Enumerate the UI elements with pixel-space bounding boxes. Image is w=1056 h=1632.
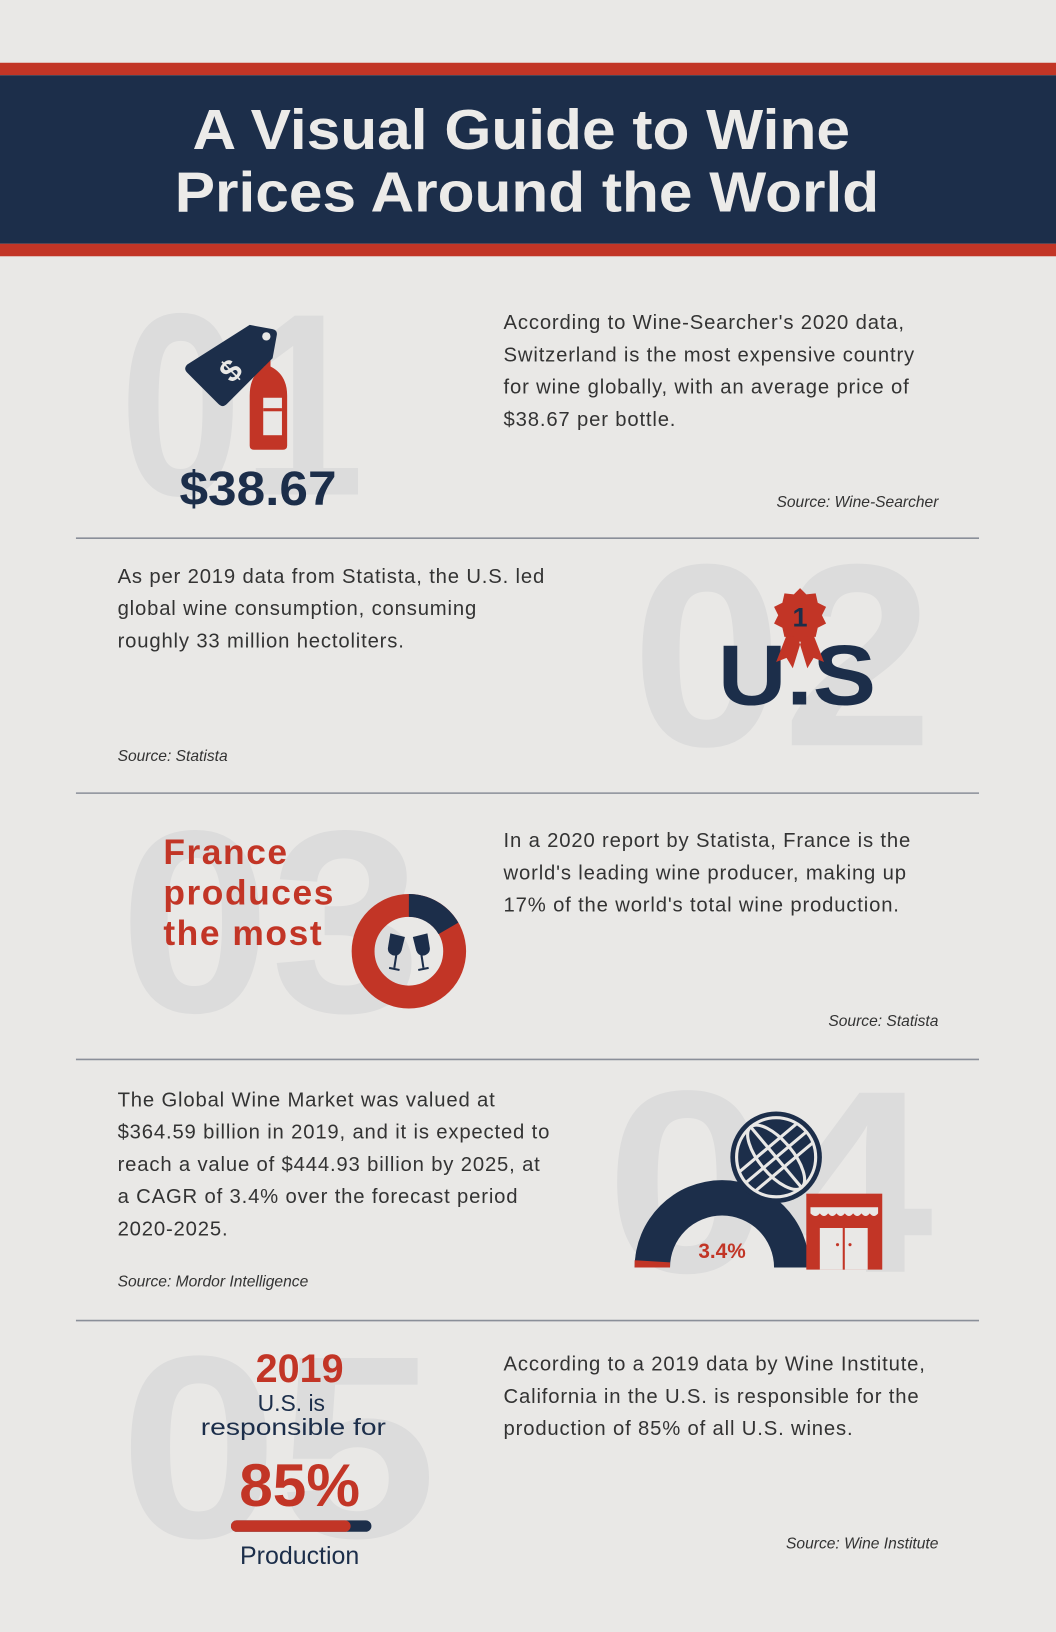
- title line 2: Prices Around the World: [175, 161, 879, 224]
- U.S. logo: U.S: [718, 629, 876, 724]
- text block 4: $364.59 billion in 2019, and it is expected to: [118, 1122, 550, 1144]
- section 4: [118, 1038, 935, 1328]
- big number 01: 01: [120, 261, 364, 551]
- gauge chart 3.4%: 3.4%: [698, 1240, 746, 1263]
- stat block 85%: 85%: [239, 1451, 360, 1519]
- icon: award badge: [774, 588, 826, 668]
- text block 1: According to Wine-Searcher's 2020 data,: [504, 312, 905, 334]
- source 3: Source: Statista: [828, 1013, 939, 1030]
- icon: wine bottle with price tag: $: [212, 352, 249, 389]
- section 3: [120, 778, 911, 1068]
- stat block 85%: responsible for: [201, 1414, 386, 1440]
- icon: store: [806, 1194, 882, 1270]
- text block 3: 17% of the world's total wine production.: [504, 895, 900, 917]
- text block 2: As per 2019 data from Statista, the U.S. led: [118, 566, 545, 588]
- header banner: [0, 63, 1056, 256]
- stat block 85%: Production: [240, 1542, 359, 1570]
- stat block 85%: [201, 1347, 386, 1570]
- gauge chart 3.4%: [635, 1180, 809, 1268]
- text block 3: In a 2020 report by Statista, France is the: [504, 830, 911, 852]
- text block 1: Switzerland is the most expensive country: [504, 344, 915, 366]
- big number 04: 04: [606, 1038, 935, 1328]
- donut chart 17%: [363, 905, 455, 997]
- source 4: Source: Mordor Intelligence: [118, 1273, 309, 1290]
- text block 5: California in the U.S. is responsible for the: [504, 1386, 919, 1408]
- text block 1: for wine globally, with an average price of: [504, 377, 910, 399]
- icon: award badge: 1: [793, 603, 808, 633]
- heading: France produces the most: France: [163, 833, 289, 872]
- text block 4: reach a value of $444.93 billion by 2025, at: [118, 1154, 541, 1176]
- text block 4: a CAGR of 3.4% over the forecast period: [118, 1186, 518, 1208]
- text block 5: production of 85% of all U.S. wines.: [504, 1418, 853, 1440]
- icon: wine bottle with price tag: [185, 325, 287, 450]
- stat value: $38.67: [179, 463, 337, 516]
- section 2: [118, 511, 933, 801]
- section 1: [120, 261, 915, 551]
- text block 3: world's leading wine producer, making up: [503, 862, 907, 884]
- text block 2: roughly 33 million hectoliters.: [118, 630, 405, 652]
- text block 2: global wine consumption, consuming: [118, 598, 477, 620]
- title: A Visual Guide to Wine: [192, 98, 850, 161]
- big number 05: 05: [120, 1303, 437, 1593]
- heading: France produces the most: the most: [163, 914, 323, 953]
- source 5: Source: Wine Institute: [786, 1535, 939, 1552]
- icon: wine glasses: [389, 935, 429, 970]
- stat block 85%: 2019: [256, 1347, 344, 1391]
- big number 03: 03: [120, 778, 421, 1068]
- stat block 85%: U.S. is: [258, 1390, 325, 1416]
- big number 02: 02: [632, 511, 933, 801]
- icon: globe: [720, 1102, 832, 1213]
- heading: France produces the most: produces: [163, 873, 335, 912]
- text block 1: $38.67 per bottle.: [504, 409, 676, 431]
- text block 5: According to a 2019 data by Wine Institute,: [504, 1354, 926, 1376]
- text block 4: The Global Wine Market was valued at: [118, 1089, 496, 1111]
- section 5: [120, 1303, 926, 1593]
- source 1: Source: Wine-Searcher: [776, 494, 939, 511]
- source 2: Source: Statista: [118, 748, 228, 765]
- text block 4: 2020-2025.: [118, 1218, 228, 1240]
